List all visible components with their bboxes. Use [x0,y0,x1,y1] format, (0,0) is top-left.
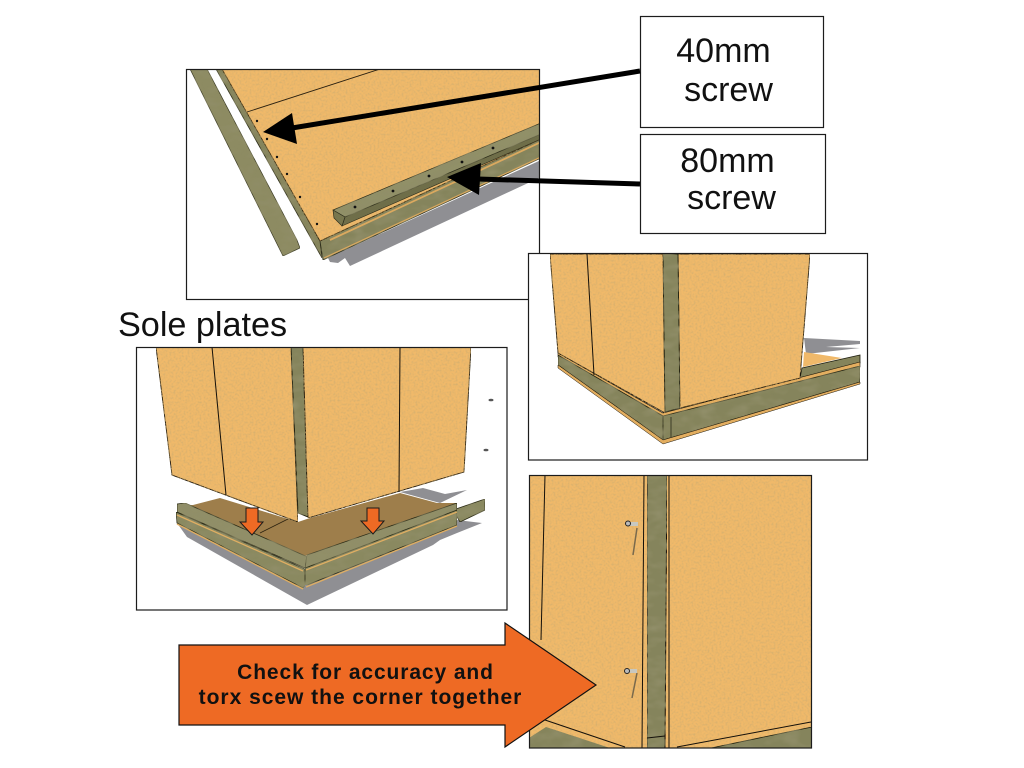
callout box: 40mm screw: 40mm [676,32,771,70]
base left [558,355,663,440]
callout box: 80mm screw [640,134,826,234]
callout box: 40mm screw: screw [684,71,773,109]
orange bottom strip [558,365,860,444]
left wall [550,254,665,413]
panel: walls lowered onto sole plates [156,347,494,605]
corner post [291,347,308,517]
post base line [647,736,665,738]
panel 3 background [528,254,868,460]
panel: walls seated on plates [528,254,868,460]
arrow: 80mm screw pointer [447,163,640,195]
right wall [678,254,810,408]
sole plate base right [305,510,457,585]
loose screws [484,399,494,451]
arrow: 40mm screw pointer [263,71,640,144]
bottom plate left [529,727,610,748]
sole plate base left [176,512,305,588]
extended strip right [457,499,485,522]
corner post [647,475,667,748]
corner joint line [670,417,672,437]
top plate right [305,503,457,568]
corner post [663,254,680,412]
floor screw dots [256,120,318,225]
top plate left [177,503,310,568]
orange down arrow right [361,508,384,534]
rear shadow [804,338,860,354]
sole plate strip on floor [333,123,541,226]
OSB floor board [222,69,541,241]
callout box: 40mm screw [640,16,824,128]
panel: torx screwed corner [529,475,812,749]
OSB wall background [529,475,812,749]
board seam [247,69,380,112]
callout box: 80mm screw: screw [687,179,776,217]
callout arrow: check for accuracy: Check for accuracy and [237,661,494,684]
orange board strip [558,353,860,418]
floor front face [320,139,541,260]
upper torx screw [626,521,638,555]
rear floor [803,352,842,367]
brown floor [180,493,457,556]
wall seams [212,347,400,495]
panel: floor corner with screws [190,69,541,266]
orange board layers [324,142,541,258]
right wall [303,347,471,518]
orange lines on base [177,512,457,589]
orange down arrow left [240,508,263,535]
callout arrow: check for accuracy: torx scew the corner together [199,686,522,709]
panel 4 border [530,476,812,748]
panel 1 border [186,70,540,300]
callout arrow: check for accuracy [179,623,596,747]
floor side edge [216,69,322,258]
bottom plate right [711,727,812,748]
rear sole plate [800,355,860,378]
floor shadow [328,160,541,266]
lower torx screw [624,668,637,698]
loose sole plate strip [190,69,300,256]
panel 2 border [136,348,507,610]
wall seam [587,254,594,375]
shadows [177,488,482,605]
left wall [156,347,298,522]
panel 3 border [528,254,868,460]
heading: Sole plates: Sole plates [118,306,287,344]
base right [663,366,860,440]
seam lines [541,475,811,748]
callout box: 80mm screw: 80mm [680,142,775,180]
floor seam [260,518,290,533]
